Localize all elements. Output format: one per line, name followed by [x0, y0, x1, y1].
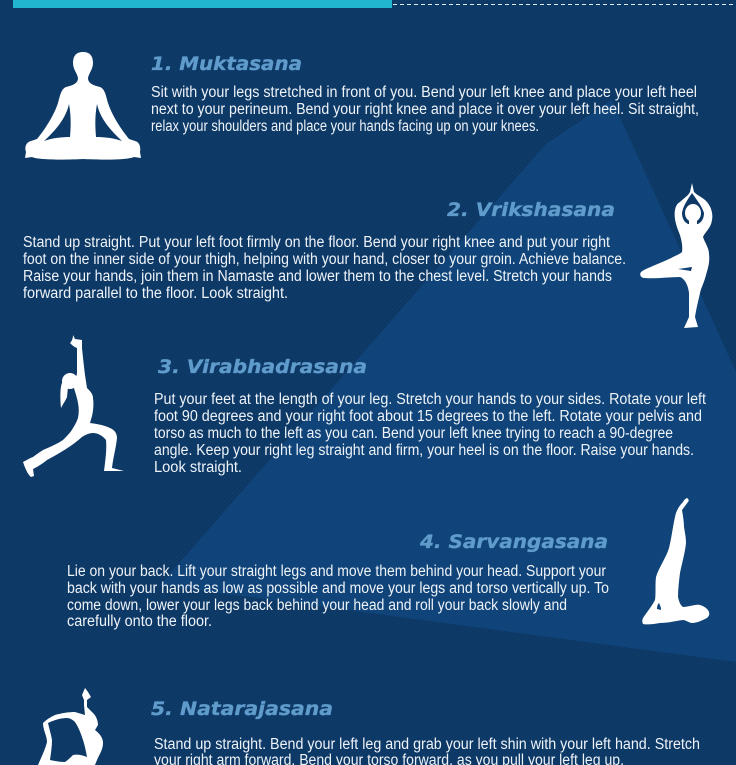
heading: 3. Virabhadrasana	[158, 356, 367, 378]
description: forward parallel to the floor. Look straight.	[23, 285, 288, 302]
description	[154, 391, 707, 476]
background triangle	[160, 100, 736, 662]
section 2: Vrikshasana	[23, 183, 712, 328]
description: Stand up straight. Bend your left leg and grab your left shin with your left hand. Stretch	[154, 736, 700, 753]
description: relax your shoulders and place your hands facing up on your knees.	[151, 118, 539, 135]
description: torso as much to the left as you can. Bend your left knee trying to reach a 90-degree	[154, 425, 673, 442]
icon: tree pose	[640, 183, 712, 328]
description: carefully onto the floor.	[67, 613, 212, 630]
description: come down, lower your legs back behind your head and roll your back slowly and	[67, 597, 567, 614]
description: foot 90 degrees and your right foot about 15 degrees to the left. Rotate your pelvis and	[154, 408, 702, 425]
icon: warrior pose	[23, 335, 124, 477]
dashed divider	[393, 4, 736, 6]
description: Raise your hands, join them in Namaste and lower them to the chest level. Stretch your hands	[23, 268, 612, 285]
heading: 5. Natarajasana	[151, 698, 333, 720]
description	[154, 736, 700, 765]
description: Lie on your back. Lift your straight legs and move them behind your head. Support your	[67, 563, 606, 580]
description: Put your feet at the length of your leg. Stretch your hands to your sides. Rotate your left	[154, 391, 707, 408]
heading: 2. Vrikshasana	[447, 199, 615, 221]
heading: 1. Muktasana	[151, 53, 302, 75]
heading: 4. Sarvangasana	[419, 531, 608, 553]
description: foot on the inner side of your thigh, helping with your hand, closer to your groin. Achieve balance.	[23, 251, 626, 268]
description: angle. Keep your right leg straight and firm, your heel is on the floor. Raise your hands.	[154, 442, 694, 459]
section 4: Sarvangasana	[67, 498, 709, 630]
icon: dancer pose	[38, 688, 103, 765]
icon: seated lotus pose	[25, 52, 141, 160]
description	[23, 234, 626, 302]
section 5: Natarajasana	[38, 688, 700, 765]
description: Look straight.	[154, 459, 242, 476]
description	[67, 563, 609, 630]
section 3: Virabhadrasana	[23, 335, 707, 477]
description: Sit with your legs stretched in front of you. Bend your left knee and place your left heel	[151, 84, 697, 101]
section 1: Muktasana	[25, 52, 699, 160]
top teal bar	[13, 0, 392, 8]
icon: shoulder stand	[642, 498, 709, 624]
description: Stand up straight. Put your left foot firmly on the floor. Bend your right knee and put your right	[23, 234, 611, 251]
description	[151, 84, 699, 135]
description: back with your hands as low as possible and move your legs and torso vertically up. To	[67, 580, 609, 597]
description: next to your perineum. Bend your right knee and place it over your left heel. Sit straight,	[151, 101, 699, 118]
